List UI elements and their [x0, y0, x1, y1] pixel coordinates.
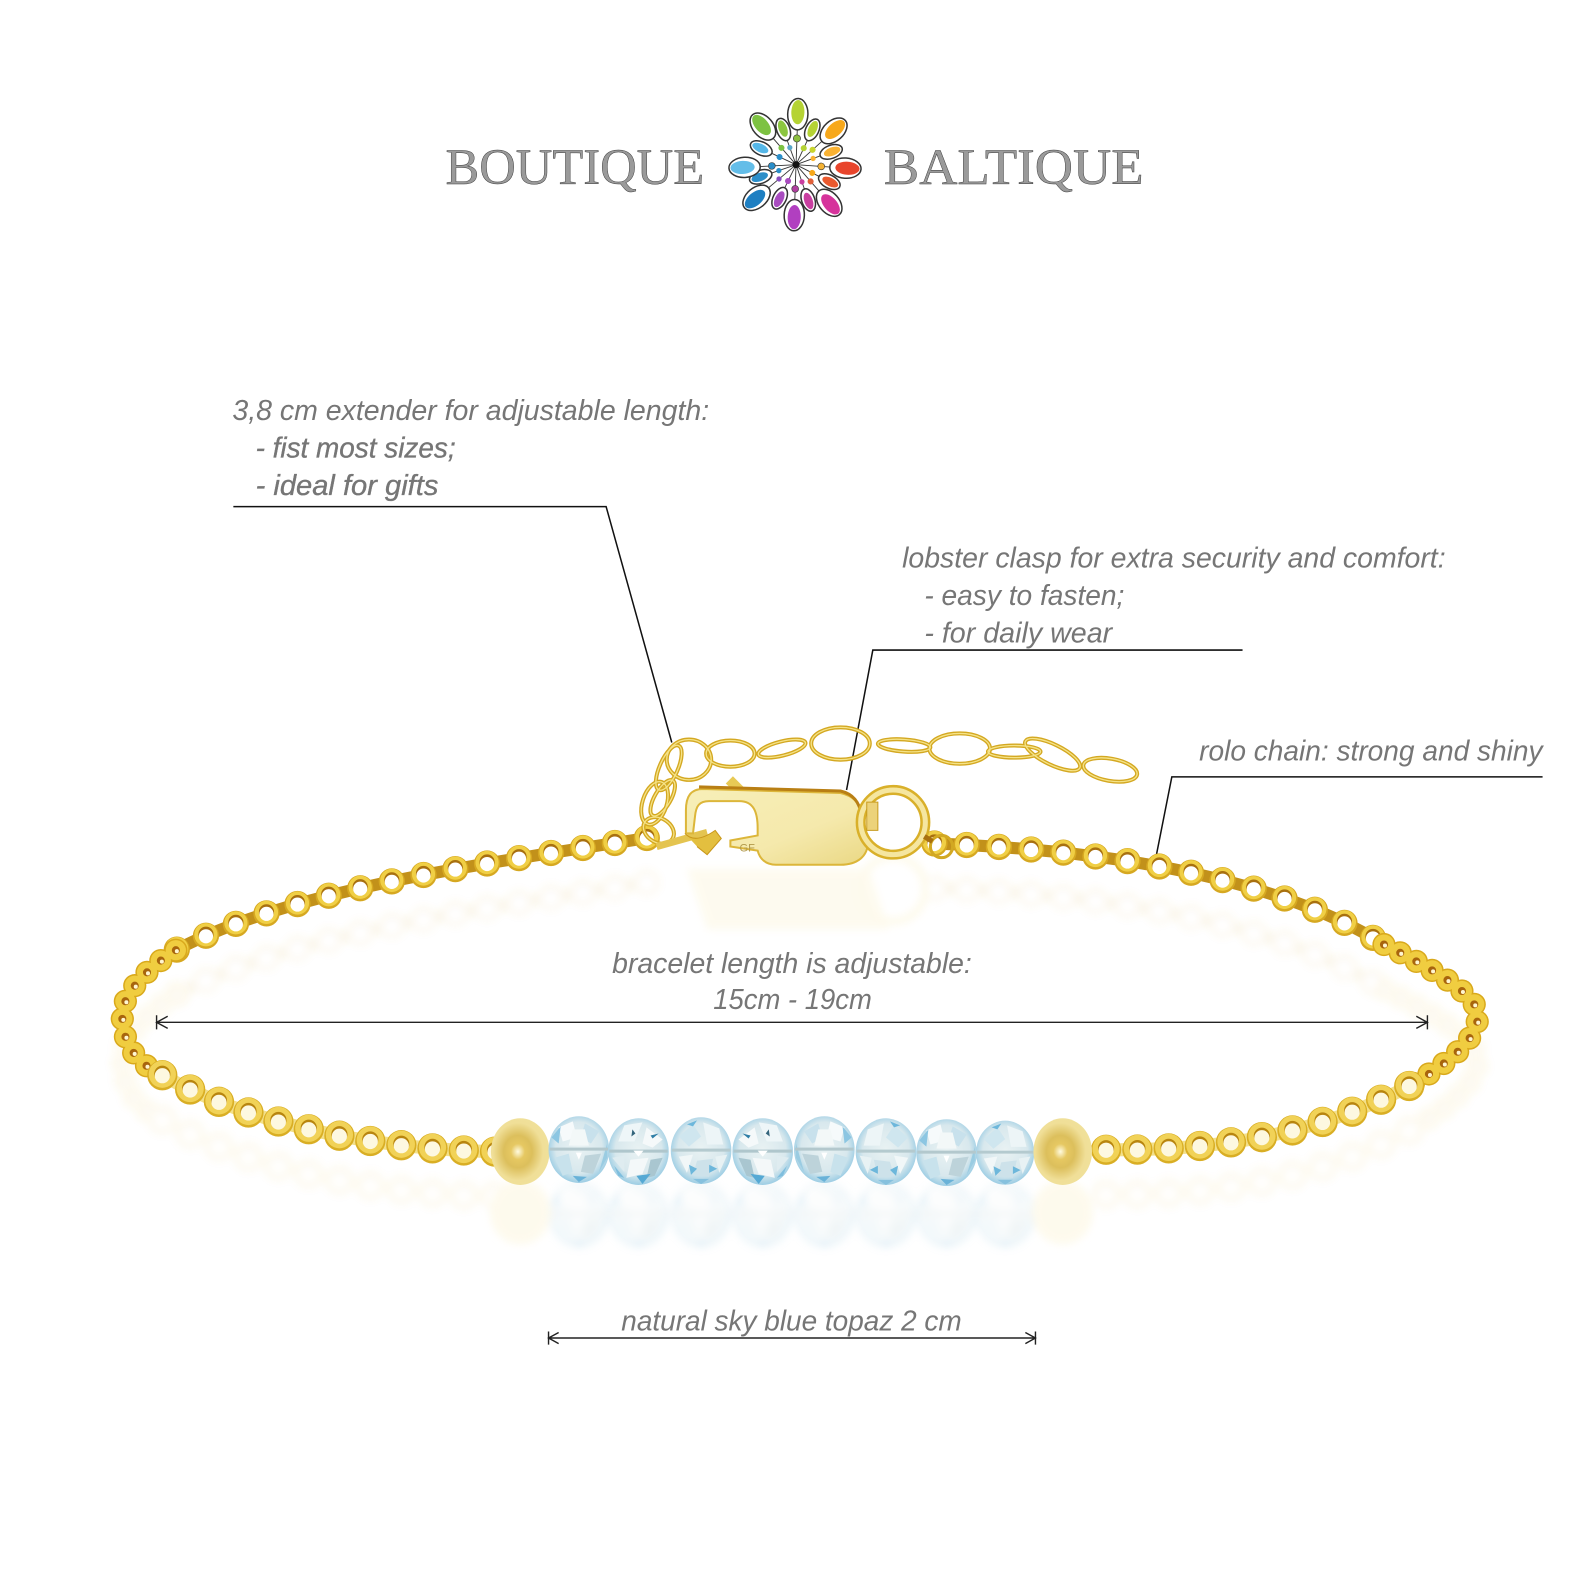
- extender text: 3,8 cm extender for adjustable length:: [232, 394, 709, 426]
- gold bead left: [491, 1118, 550, 1185]
- bracelet reflection: [122, 857, 1479, 1248]
- bracelet: [122, 727, 1479, 1186]
- bracelet length text: [612, 947, 972, 1015]
- clasp text: [902, 542, 1446, 648]
- arrow: topaz section: [549, 1331, 1035, 1345]
- icon: colourful flower emblem: [728, 98, 862, 231]
- GF stamp: GF: [739, 843, 755, 855]
- arrow: bracelet width: [157, 1015, 1427, 1029]
- callout: lobster clasp: [847, 542, 1446, 790]
- clasp leader line: [847, 650, 1243, 790]
- extender text: - fist most sizes;: [256, 432, 456, 464]
- rolo chain text: rolo chain: strong and shiny: [1199, 735, 1544, 767]
- logo word: Boutique: BOUTIQUE: [445, 139, 704, 195]
- dimension: bracelet length: [157, 947, 1427, 1029]
- extender text: [232, 394, 709, 501]
- rolo chain: [122, 835, 1479, 1152]
- extender text: - ideal for gifts: [256, 469, 438, 501]
- dimension: topaz length: [549, 1304, 1035, 1345]
- extender leader line: [233, 507, 672, 742]
- topaz length text: natural sky blue topaz 2 cm: [621, 1304, 962, 1336]
- topaz beads: [549, 1116, 1034, 1186]
- jump ring: [861, 790, 953, 858]
- clasp text: - for daily wear: [924, 616, 1114, 648]
- bracelet length text: bracelet length is adjustable:: [612, 947, 972, 979]
- rolo chain leader line: [1155, 777, 1543, 864]
- lobster clasp: [685, 787, 868, 865]
- clasp text: lobster clasp for extra security and comfort:: [902, 542, 1446, 574]
- gold bead right: [1033, 1118, 1092, 1185]
- clasp text: - easy to fasten;: [924, 579, 1124, 611]
- logo word: Baltique: BALTIQUE: [884, 139, 1144, 195]
- callout: extender: [232, 394, 709, 742]
- logo: [446, 98, 1144, 231]
- bracelet length text: 15cm - 19cm: [713, 983, 872, 1015]
- callout: rolo chain: [1155, 735, 1544, 864]
- extender chain: [636, 727, 1139, 849]
